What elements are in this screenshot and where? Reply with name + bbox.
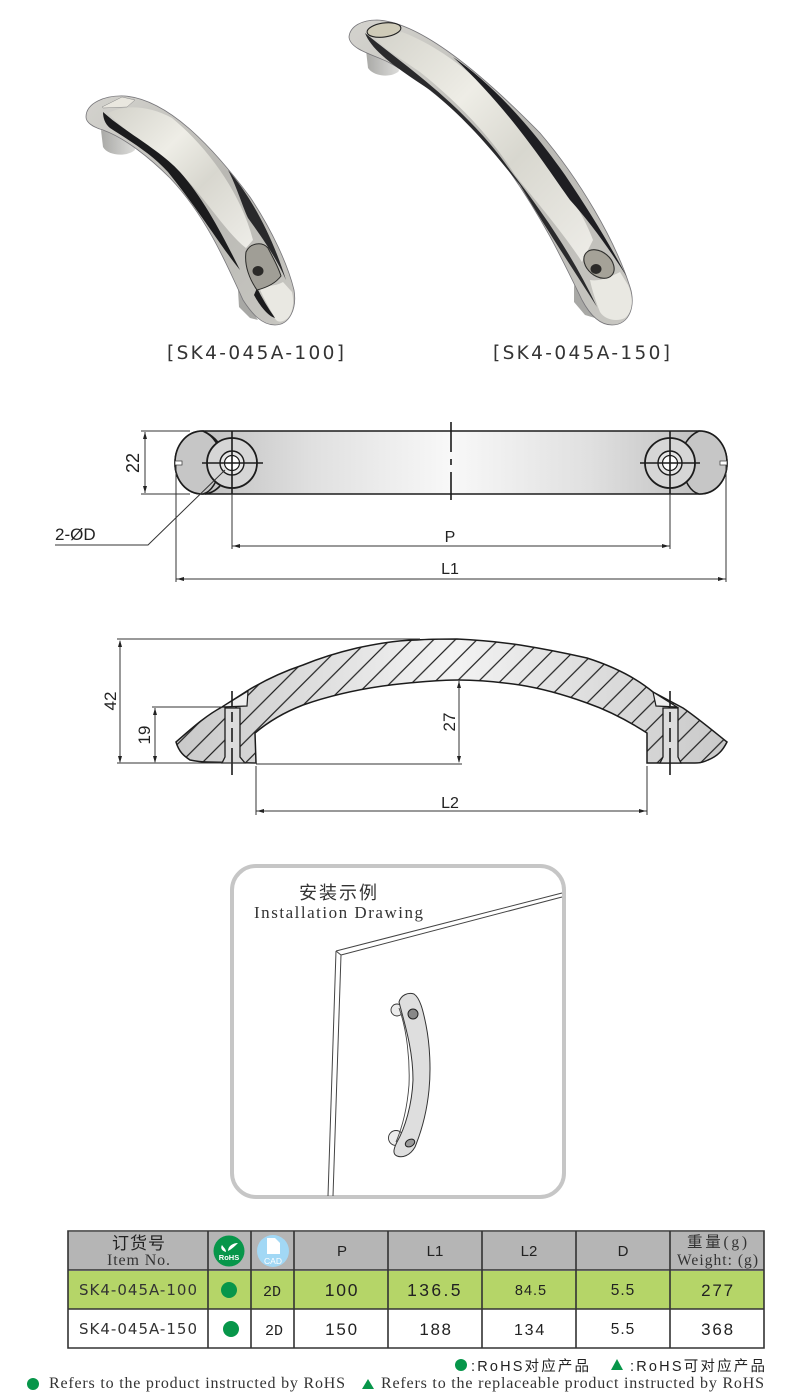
product photo: handle SK4-045A-100 <box>86 96 295 325</box>
polished end face <box>258 282 293 322</box>
row: SK4-045A-150 <box>79 1320 735 1340</box>
legend: Chinese: :RoHS可对应产品 <box>630 1357 765 1375</box>
hatched cross-section <box>176 639 727 763</box>
header: weight <box>677 1233 758 1269</box>
dimension: L2 <box>256 766 647 815</box>
polished top face <box>108 107 253 248</box>
dimension: 2-ØD leader <box>55 470 225 545</box>
legend marker: circle <box>455 1359 467 1371</box>
dark reflection, end <box>254 288 275 318</box>
icon: RoHS: RoHS <box>219 1253 239 1262</box>
legend marker: circle <box>27 1378 39 1390</box>
legend: Chinese: :RoHS对应产品 <box>471 1357 589 1375</box>
screw pocket, far end <box>366 21 402 39</box>
spec table <box>68 1231 764 1348</box>
small handle illustration <box>388 993 430 1157</box>
door outline <box>328 893 562 1196</box>
dimension: 22: 22 <box>123 453 143 473</box>
row: SK4-045A-100: SK4-045A-100 <box>79 1281 197 1299</box>
row: SK4-045A-150: 368 <box>701 1320 735 1339</box>
row: SK4-045A-150: 2D <box>265 1323 283 1340</box>
row: SK4-045A-100 <box>79 1280 735 1301</box>
legend: English: Refers to the product instructed by RoHS <box>49 1375 345 1392</box>
product photo: handle SK4-045A-150 <box>349 20 632 325</box>
handle body <box>86 96 295 325</box>
handle foot, upper <box>101 130 135 155</box>
dark reflection, lower edge <box>103 112 240 270</box>
dimension: P: P <box>445 529 455 546</box>
icon: CAD: CAD <box>264 1256 282 1266</box>
screw pocket, far end <box>102 97 135 108</box>
handle bar <box>175 431 727 494</box>
table header row <box>68 1232 764 1270</box>
dark reflection, lower edge <box>365 33 597 307</box>
dimension: 42: 42 <box>101 692 120 710</box>
row: SK4-045A-150: 150 <box>325 1320 359 1339</box>
header: item no: Item No. <box>107 1252 170 1269</box>
mounting hole, right <box>640 431 700 494</box>
dimension: 27: 27 <box>440 713 459 731</box>
dimension: L1: L1 <box>441 561 459 578</box>
row: SK4-045A-100: 5.5 <box>611 1282 635 1299</box>
handle foot, lower <box>238 290 258 320</box>
label: SK4-045A-150: [SK4-045A-150] <box>493 343 670 364</box>
dimension: 19: 19 <box>135 726 154 744</box>
legend marker: triangle <box>611 1359 623 1370</box>
row: SK4-045A-150: 188 <box>419 1320 453 1339</box>
header: weight: 重量(g) <box>687 1233 747 1251</box>
panel: installation drawing <box>232 866 564 1197</box>
dark reflection, upper edge <box>453 57 627 277</box>
label: SK4-045A-100: [SK4-045A-100] <box>167 343 344 364</box>
dimension: 22 <box>123 431 190 494</box>
header: P: P <box>337 1243 347 1260</box>
screw pocket, near end <box>246 244 281 290</box>
screw pocket, near end <box>578 244 620 284</box>
handle body <box>349 20 632 325</box>
row: SK4-045A-150: 5.5 <box>611 1321 635 1338</box>
row: SK4-045A-100: 2D <box>263 1284 281 1301</box>
screw hole, near end <box>252 266 264 276</box>
header: D: D <box>618 1243 629 1260</box>
header: item no: 订货号 <box>112 1234 166 1253</box>
screw hole, near end <box>590 264 602 274</box>
handle foot, lower <box>574 285 595 318</box>
mounting hole, left <box>202 431 263 494</box>
row: SK4-045A-100: 100 <box>325 1280 359 1300</box>
dimension: 2-ØD leader: 2-ØD <box>55 525 96 544</box>
handle foot, upper <box>366 50 399 76</box>
row: SK4-045A-150: 134 <box>514 1322 546 1339</box>
row: SK4-045A-100: 277 <box>701 1281 735 1300</box>
dimension: L1 <box>176 465 726 582</box>
dimension: P <box>232 494 670 549</box>
row: SK4-045A-100: 136.5 <box>407 1280 463 1300</box>
dimension: L2: L2 <box>441 795 459 812</box>
top view drawing <box>55 422 727 582</box>
header: item no <box>107 1234 170 1269</box>
header: L2: L2 <box>521 1243 537 1260</box>
dimension: 19 <box>135 707 222 763</box>
screw bore, right <box>653 691 681 775</box>
legend: Chinese <box>455 1357 765 1375</box>
legend: English: Refers to the replaceable product instructed by RoHS <box>381 1375 764 1392</box>
dark reflection, right edge <box>228 170 286 280</box>
dimension: 42 <box>101 639 420 763</box>
header: weight: Weight: (g) <box>677 1252 758 1269</box>
section view drawing <box>101 639 727 815</box>
heading: Chinese: 安装示例 <box>299 879 379 905</box>
row: SK4-045A-100: 84.5 <box>515 1283 547 1299</box>
screw bore, left <box>222 691 248 775</box>
icon: CAD <box>257 1235 289 1267</box>
legend marker: triangle <box>362 1379 374 1389</box>
icon: RoHS <box>214 1236 244 1266</box>
polished top face <box>372 32 593 262</box>
polished end face <box>590 272 632 320</box>
table row: SK4-045A-100 background <box>68 1271 764 1309</box>
dimension: 27 <box>256 681 462 764</box>
header: L1: L1 <box>427 1243 443 1260</box>
row: SK4-045A-150: SK4-045A-150 <box>79 1320 197 1338</box>
heading: English: Installation Drawing <box>254 903 424 922</box>
legend: English <box>27 1375 764 1392</box>
hatch lines <box>176 639 727 763</box>
